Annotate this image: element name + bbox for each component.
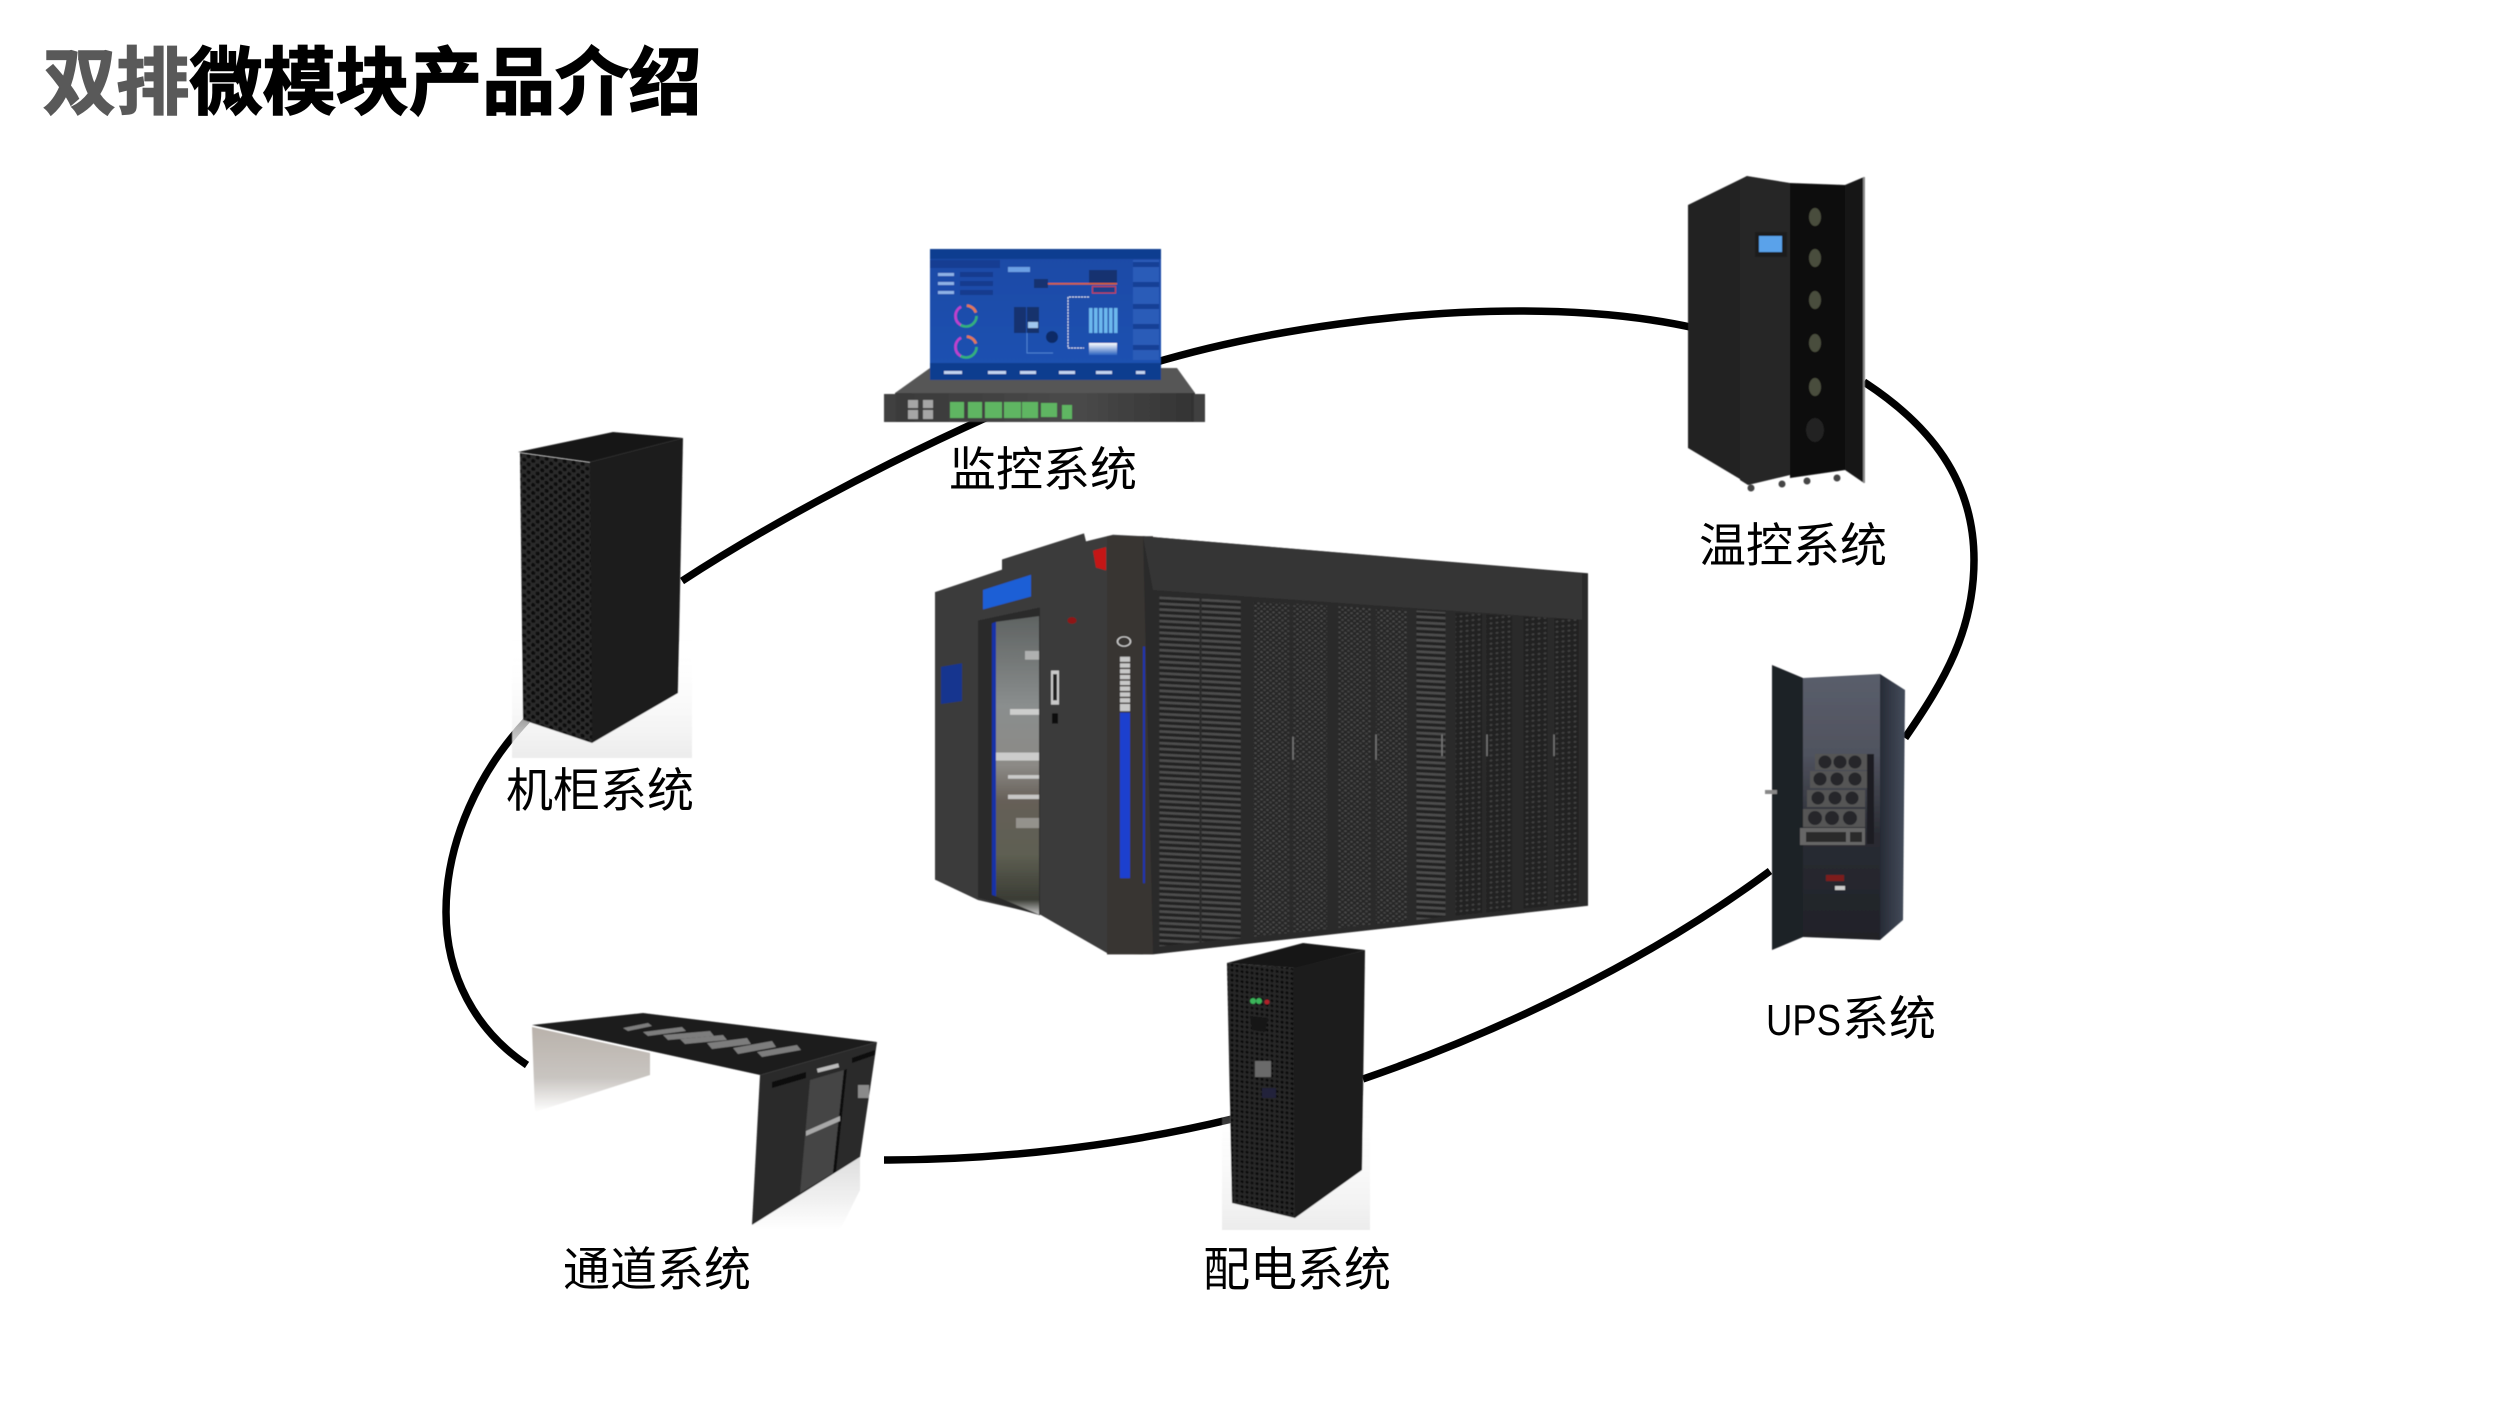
pillar logo — [1118, 637, 1130, 646]
access card reader — [1051, 671, 1059, 724]
distribution perforated front — [1227, 963, 1295, 1218]
panel: cooling system — [1688, 176, 1865, 492]
monitoring screen — [930, 249, 1161, 380]
blue door frame — [992, 622, 996, 896]
wall touch screen — [941, 663, 962, 704]
UPS open door — [1772, 665, 1803, 950]
door gap — [833, 1069, 847, 1173]
aisle side glass fade — [532, 1027, 650, 1112]
rack doors — [1159, 596, 1579, 946]
pillar LED strip — [1120, 657, 1130, 878]
distribution floor shadow — [1222, 1090, 1370, 1230]
label: monitoring system: 监控系统 — [949, 431, 1137, 500]
panel: central double-row micro module — [935, 533, 1588, 954]
panel: power distribution system — [1222, 943, 1370, 1230]
module front end wall — [935, 533, 1143, 954]
UPS side wall — [1880, 674, 1905, 940]
aisle roof skylights — [623, 1023, 801, 1057]
cooling unit body side — [1688, 176, 1750, 485]
label: power distribution system: 配电系统 — [1203, 1231, 1391, 1300]
cooling unit feet — [1748, 474, 1840, 492]
label: aisle system: 通道系统 — [563, 1231, 751, 1300]
panel: aisle system — [532, 1013, 877, 1230]
cooling fans — [1806, 208, 1824, 442]
cabinet floor shadow — [512, 640, 692, 758]
cabinet top — [518, 432, 683, 462]
monitoring rack top — [895, 368, 1195, 393]
label: cooling system: 温控系统 — [1699, 507, 1887, 576]
UPS power modules — [1800, 754, 1874, 845]
top fascia band — [1143, 536, 1582, 620]
title: 双排微模块产品介绍 — [43, 24, 702, 130]
UPS interior — [1803, 674, 1880, 940]
distribution meter — [1262, 1088, 1276, 1098]
aisle sliding door — [800, 1070, 844, 1193]
label: cabinet system: 机柜系统 — [506, 752, 694, 821]
door opening — [978, 607, 1040, 915]
sliding glass door — [996, 616, 1039, 914]
monitoring rack front — [895, 393, 1195, 422]
network ports — [908, 400, 933, 419]
blue door sign — [983, 575, 1031, 610]
label: UPS system — [1766, 980, 1936, 1049]
cooling open door — [1845, 177, 1864, 483]
door handle bar — [806, 1116, 840, 1136]
panel: UPS system — [1765, 665, 1905, 950]
panel: monitoring system — [884, 249, 1205, 422]
distribution QR plate — [1255, 1061, 1271, 1077]
fire alarm — [1093, 547, 1106, 570]
corner pillar — [1107, 536, 1153, 954]
monitoring gauges — [956, 306, 976, 358]
cooling open interior — [1790, 183, 1845, 478]
red indicator — [1068, 617, 1076, 624]
aisle vents — [772, 1050, 875, 1088]
UPS door handle — [1765, 790, 1777, 794]
distribution display — [1250, 1016, 1268, 1032]
cabinet side — [590, 438, 683, 743]
connecting ring — [446, 311, 1974, 1160]
green terminals — [950, 402, 1072, 419]
label: UPS system: 系统 — [1842, 980, 1936, 1049]
rack ears — [884, 394, 1205, 422]
module side wall — [1143, 536, 1588, 954]
label: UPS system: UPS — [1766, 996, 1841, 1045]
status LEDs — [1250, 998, 1270, 1004]
distribution side — [1293, 950, 1365, 1218]
thin blue pillar line — [1143, 647, 1145, 883]
cooling unit front — [1740, 176, 1790, 485]
glass reflections — [996, 651, 1039, 828]
aisle end logo — [817, 1063, 839, 1073]
aisle control screen — [858, 1085, 869, 1098]
cabinet perforated front — [520, 453, 592, 743]
panel: cabinet system — [512, 432, 692, 758]
UPS breaker switch — [1826, 875, 1845, 890]
door handles — [1293, 734, 1554, 760]
aisle end frame — [752, 1042, 877, 1225]
aisle floor reflection — [752, 1157, 860, 1230]
process diagram — [1008, 267, 1118, 355]
distribution top — [1227, 943, 1365, 968]
cooling control screen — [1755, 232, 1787, 257]
aisle roof — [532, 1013, 877, 1075]
